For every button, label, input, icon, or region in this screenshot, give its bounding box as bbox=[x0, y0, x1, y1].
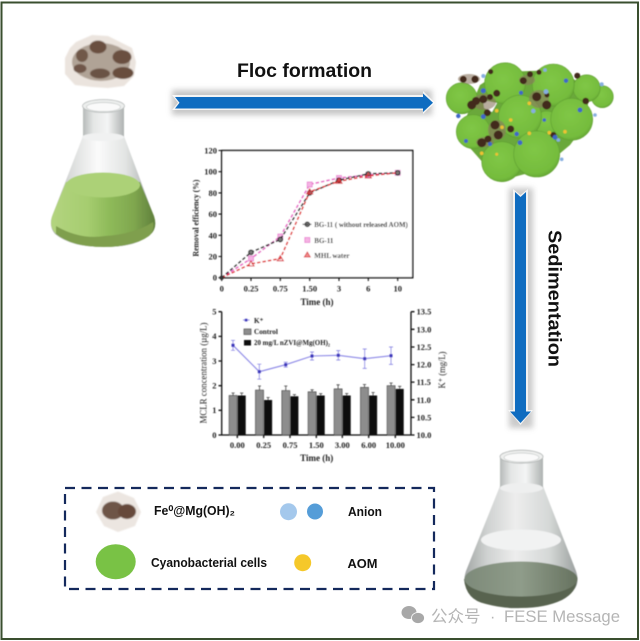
chart legend bbox=[243, 317, 330, 347]
right axis title: K⁺ (mg/L) bbox=[437, 352, 448, 388]
arrow: sedimentation bbox=[508, 188, 533, 428]
x tick labels: 0.00 bbox=[230, 440, 245, 450]
legend label: Fe0@Mg(OH)2: Fe⁰@Mg(OH)₂ bbox=[154, 503, 235, 518]
chart legend: MHL water bbox=[314, 252, 349, 260]
x tick labels: 0.75 bbox=[273, 284, 288, 294]
watermark text: Chinese: 公众号 bbox=[431, 607, 480, 626]
y tick labels: 100 bbox=[204, 167, 217, 177]
legend icon: AOM bbox=[294, 554, 311, 571]
x tick labels: 10 bbox=[393, 284, 402, 294]
heading: floc formation: Floc formation bbox=[237, 61, 372, 82]
error bars bbox=[232, 383, 401, 400]
left tick labels bbox=[212, 306, 217, 440]
x axis title: Time (h) bbox=[300, 297, 334, 307]
x tick labels: 0.25 bbox=[244, 284, 258, 294]
right tick labels: 11.0 bbox=[416, 395, 431, 405]
illustration: cyanobacteria floc bbox=[446, 63, 613, 182]
x tick labels: 0.25 bbox=[256, 440, 271, 450]
left tick labels: 5 bbox=[212, 306, 216, 316]
series: MHL water bbox=[222, 173, 398, 278]
icon: flask with green culture bbox=[51, 100, 155, 247]
chart legend: BG-11 ( without released AOM) bbox=[314, 221, 408, 229]
watermark icon bbox=[402, 606, 424, 624]
x tick labels: 3.00 bbox=[335, 440, 350, 450]
right tick labels: 13.5 bbox=[416, 307, 431, 317]
right tick labels: 11.5 bbox=[416, 377, 431, 387]
x tick labels: 0 bbox=[220, 284, 224, 294]
chart axes frame bbox=[222, 150, 413, 278]
control bars bbox=[229, 386, 395, 435]
left tick labels: 3 bbox=[212, 356, 216, 366]
legend icon: cyanobacterial cell bbox=[96, 544, 136, 579]
icon: iron particle cluster bbox=[65, 35, 136, 88]
watermark bbox=[402, 606, 620, 626]
y tick labels: 120 bbox=[204, 146, 217, 156]
x tick labels: 6 bbox=[366, 284, 370, 294]
y tick labels: 80 bbox=[208, 188, 217, 198]
icon: flask after sedimentation bbox=[464, 450, 578, 608]
chart legend: 20 mg/L nZVI@Mg(OH)₂ bbox=[254, 339, 330, 347]
y axis title: Removal efficiency (%) bbox=[190, 179, 200, 256]
legend panel bbox=[65, 488, 434, 589]
watermark text: separator: · bbox=[490, 609, 495, 626]
y tick labels: 40 bbox=[208, 230, 217, 240]
x tick labels: 10.00 bbox=[386, 440, 405, 450]
legend label: cyanobacterial cells: Cyanobacterial cells bbox=[151, 555, 267, 570]
x tick labels: 6.00 bbox=[361, 440, 376, 450]
x tick labels: 0.75 bbox=[283, 440, 297, 450]
right tick labels: 10.0 bbox=[416, 430, 431, 440]
x axis title: Time (h) bbox=[300, 453, 333, 463]
y tick labels: 20 bbox=[208, 252, 217, 262]
left tick labels: 4 bbox=[212, 331, 217, 341]
series: BG-11 bbox=[222, 170, 400, 278]
y tick labels bbox=[204, 146, 217, 283]
y tick labels: 60 bbox=[208, 209, 217, 219]
chart legend bbox=[302, 221, 408, 260]
x tick labels: 1.50 bbox=[309, 440, 324, 450]
left axis title: MCLR concentration (µg/L) bbox=[198, 322, 210, 424]
heading: sedimentation: Sedimentation bbox=[544, 230, 566, 367]
chart legend: K⁺ bbox=[254, 317, 264, 325]
x tick labels bbox=[220, 284, 402, 294]
x tick labels: 1.50 bbox=[302, 284, 317, 294]
chart legend: BG-11 bbox=[314, 237, 334, 245]
legend icon: anion dark bbox=[307, 504, 323, 520]
right tick labels: 10.5 bbox=[416, 412, 431, 422]
nZVI bars bbox=[238, 389, 404, 435]
arrow: floc formation bbox=[172, 90, 435, 115]
chart: removal efficiency over time bbox=[190, 146, 413, 307]
legend icon: anion light bbox=[280, 503, 297, 520]
right tick labels bbox=[416, 307, 431, 440]
y tick labels: 0 bbox=[213, 273, 217, 283]
series: BG-11 without released AOM bbox=[222, 170, 400, 278]
right tick labels: 12.5 bbox=[416, 342, 431, 352]
chart: MCLR concentration and K+ bbox=[198, 306, 448, 463]
legend label: anion: Anion bbox=[348, 504, 382, 519]
legend label: AOM: AOM bbox=[348, 556, 378, 571]
series: K+ line bbox=[231, 340, 393, 379]
left tick labels: 1 bbox=[212, 405, 216, 415]
right tick labels: 13.0 bbox=[416, 324, 431, 334]
x tick labels bbox=[230, 440, 405, 450]
left tick labels: 0 bbox=[212, 430, 216, 440]
x tick labels: 3 bbox=[337, 284, 341, 294]
watermark text: FESE Message: FESE Message bbox=[504, 608, 620, 626]
right tick labels: 12.0 bbox=[416, 360, 431, 370]
chart axes bbox=[218, 312, 414, 438]
left tick labels: 2 bbox=[212, 380, 216, 390]
chart legend: Control bbox=[254, 328, 278, 336]
legend icon: Fe0@Mg(OH)2 bbox=[96, 492, 141, 532]
